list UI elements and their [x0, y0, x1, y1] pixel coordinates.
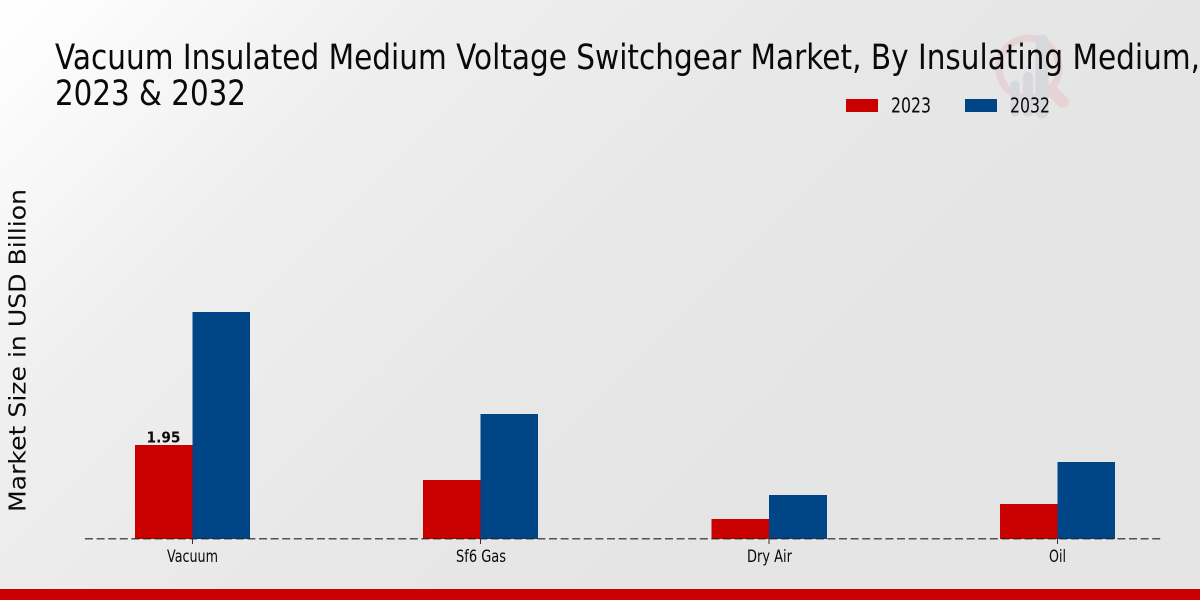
- x axis labels: Sf6 Gas: [456, 547, 506, 566]
- legend: [846, 94, 1050, 118]
- x axis labels: Dry Air: [747, 547, 792, 566]
- group: Sf6 Gas bars: [423, 414, 538, 539]
- group: Oil bars: [1000, 462, 1115, 539]
- title: [55, 38, 1200, 114]
- data label: 1.95: [146, 428, 180, 446]
- legend: 2032: [1010, 94, 1050, 118]
- icon: watermark logo: [999, 38, 1063, 112]
- footer bar: [0, 589, 1200, 600]
- legend: 2023: [891, 94, 931, 118]
- x axis labels: Oil: [1049, 547, 1066, 566]
- group: Dry Air bars: [712, 495, 827, 539]
- x axis labels: Vacuum: [167, 547, 218, 566]
- bar chart: [85, 312, 1164, 544]
- y axis title: Market Size in USD Billion: [6, 189, 32, 512]
- title: 2023 & 2032: [55, 74, 246, 114]
- x axis labels: [167, 547, 1066, 566]
- group: Vacuum bars: [135, 312, 250, 539]
